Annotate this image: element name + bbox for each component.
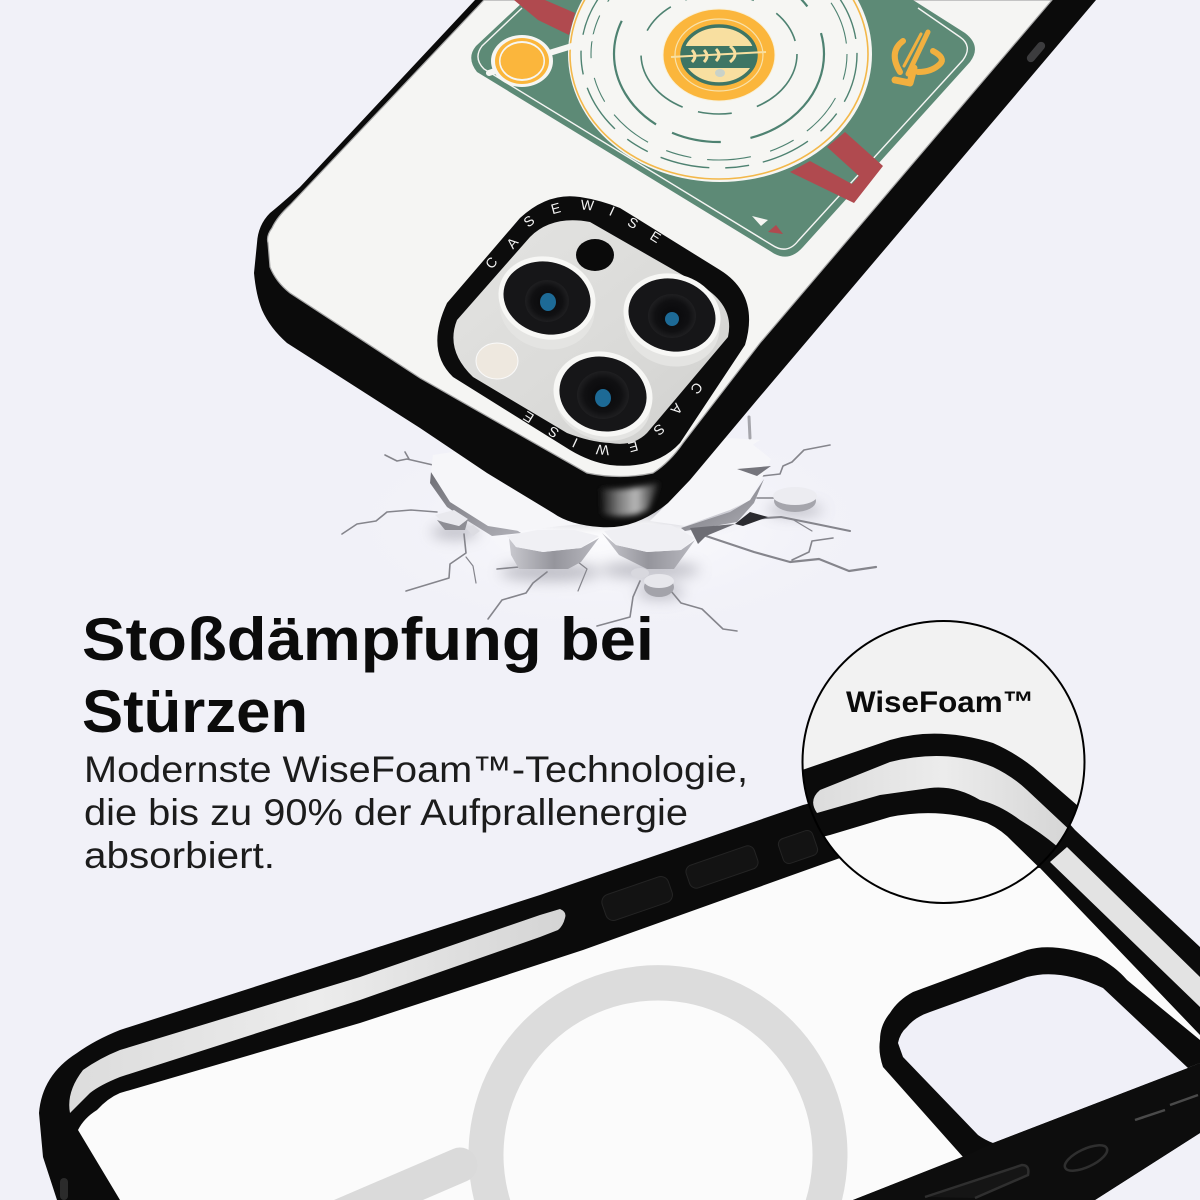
red strip top	[514, 0, 575, 35]
bottom right bumper	[853, 1063, 1200, 1200]
side cushion slot	[69, 909, 565, 1113]
magnified frame	[804, 734, 1077, 866]
case back panel	[268, 0, 1052, 476]
heading: Stoßdämpfung bei	[82, 606, 654, 673]
side buttons	[600, 829, 819, 923]
red handle bottom	[790, 132, 883, 203]
artwork: retro turntable	[471, 0, 975, 257]
clear back panel	[78, 858, 1200, 1200]
case frame	[39, 780, 1200, 1200]
bumper highlight	[600, 482, 660, 516]
brand ring text top: CASEWISE	[482, 196, 664, 272]
camera cutout	[898, 974, 1188, 1143]
bumper ports	[925, 1095, 1198, 1198]
brand ring text bottom: CASEWISE	[520, 379, 706, 459]
lens 3	[544, 340, 662, 451]
mythosaur emblem	[895, 32, 942, 83]
record label	[663, 9, 775, 101]
callout label: WiseFoam™	[846, 686, 1034, 719]
flash	[476, 343, 518, 379]
body text	[84, 749, 748, 876]
case black frame	[254, 0, 1096, 527]
camera plate	[453, 220, 729, 444]
left port	[60, 1178, 68, 1200]
microphone hole	[576, 239, 614, 271]
body text: Modernste WiseFoam™-Technologie,	[84, 749, 748, 790]
lens 1	[489, 246, 605, 360]
right cushion slot	[1050, 847, 1200, 1007]
turntable body	[471, 0, 975, 257]
lens 2	[614, 263, 730, 377]
side button	[1025, 40, 1047, 64]
illustration: cracked ground impact	[330, 410, 890, 640]
MagSafe alignment pill	[334, 1148, 477, 1200]
body text: die bis zu 90% der Aufprallenergie	[84, 792, 688, 833]
body text: absorbiert.	[84, 835, 275, 876]
vinyl record	[568, 0, 872, 182]
clear case: inside view	[39, 780, 1200, 1200]
tonearm	[486, 34, 594, 87]
heading	[82, 606, 654, 745]
play triangles	[752, 216, 783, 234]
MagSafe ring	[469, 965, 848, 1200]
phone with case: top	[254, 0, 1096, 527]
heading: Stürzen	[82, 678, 308, 745]
callout: WiseFoam magnifier	[790, 620, 1100, 905]
camera bump	[437, 196, 749, 466]
camera cutout frame	[879, 947, 1200, 1157]
